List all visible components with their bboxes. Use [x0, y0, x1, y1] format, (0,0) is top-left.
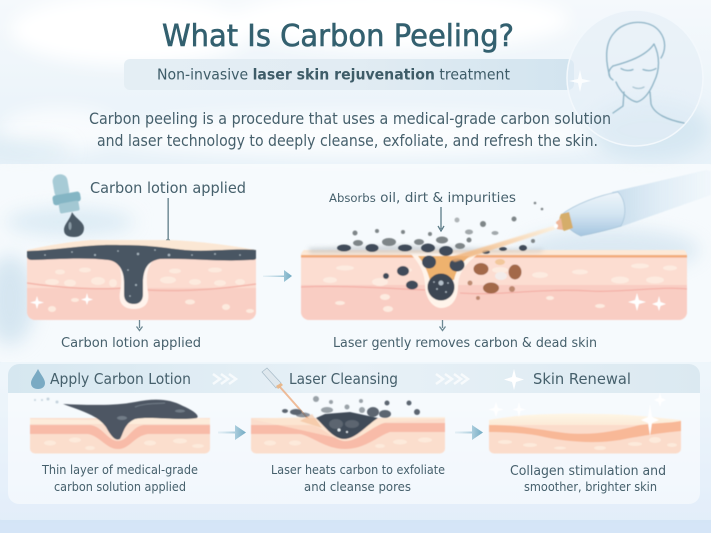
panel: carbon lotion applied	[27, 171, 256, 351]
carbon smear	[63, 400, 198, 440]
step 3 heading: Skin Renewal	[533, 370, 631, 388]
step 1 description: carbon solution applied	[54, 479, 186, 494]
down arrow	[440, 320, 446, 330]
panel: laser removal	[301, 170, 711, 351]
step 3 skin	[488, 393, 681, 455]
caption: Carbon lotion applied	[61, 335, 201, 351]
hair and head outline	[607, 22, 665, 77]
step 2 description	[271, 462, 445, 494]
intro paragraph: Carbon peeling is a procedure that uses a medical-grade carbon solution	[89, 109, 611, 128]
skin cross-section left	[27, 238, 256, 320]
step 2 description: and cleanse pores	[304, 479, 411, 494]
icon: laser pen	[262, 368, 310, 421]
face icon in circle	[567, 10, 703, 146]
pointer arrow	[438, 207, 444, 231]
icon: water drop	[31, 369, 45, 389]
sparkles	[488, 393, 666, 436]
heading: carbon lotion: Carbon lotion applied	[90, 179, 246, 197]
step 2 skin	[251, 396, 445, 454]
step 3 description: Collagen stimulation and	[510, 464, 666, 479]
carbon particles	[308, 202, 545, 300]
step 1 skin	[30, 398, 210, 454]
sparkles	[628, 293, 666, 311]
main white panel	[0, 164, 711, 520]
chevrons	[436, 374, 468, 384]
arrow: step 1 to 2	[218, 425, 246, 440]
sparkles	[30, 293, 93, 309]
step 2: laser cleansing	[251, 368, 468, 494]
panel: three steps	[8, 364, 700, 504]
subtitle band	[124, 59, 574, 90]
header band	[8, 364, 700, 393]
subtitle text: Non-invasive laser skin rejuvenation treatment	[157, 66, 510, 84]
icon: sparkle	[504, 369, 524, 390]
heading: absorbs: Absorbs oil, dirt & impurities	[329, 190, 516, 206]
step 1 description: Thin layer of medical-grade	[41, 462, 198, 477]
title: What Is Carbon Peeling?	[162, 19, 514, 54]
skin cross-section right	[301, 202, 687, 320]
follicle pit	[410, 253, 478, 308]
arrow: between main panels	[263, 270, 292, 282]
intro paragraph	[89, 109, 611, 150]
chevrons	[213, 374, 236, 384]
step 3 description	[510, 464, 666, 494]
step 3 description: smoother, brighter skin	[524, 479, 657, 494]
step 2 description: Laser heats carbon to exfoliate	[271, 462, 445, 477]
step 2 heading: Laser Cleansing	[289, 370, 398, 388]
step 1 description	[41, 462, 198, 494]
caption: Laser gently removes carbon & dead skin	[333, 335, 597, 351]
step 1: apply carbon lotion	[30, 369, 236, 494]
down arrow	[136, 320, 142, 330]
leader line	[166, 198, 170, 243]
laser handpiece	[554, 170, 711, 236]
carbon debris	[251, 417, 445, 441]
step 3: skin renewal	[488, 369, 681, 494]
arrow: step 2 to 3	[455, 425, 483, 440]
laser beam	[447, 226, 556, 262]
intro paragraph: and laser technology to deeply cleanse, exfoliate, and refresh the skin.	[97, 131, 598, 150]
step 1 heading: Apply Carbon Lotion	[50, 370, 191, 388]
carbon lotion layer	[117, 262, 152, 309]
icon: dropper	[49, 171, 84, 237]
sparkle	[569, 70, 591, 92]
